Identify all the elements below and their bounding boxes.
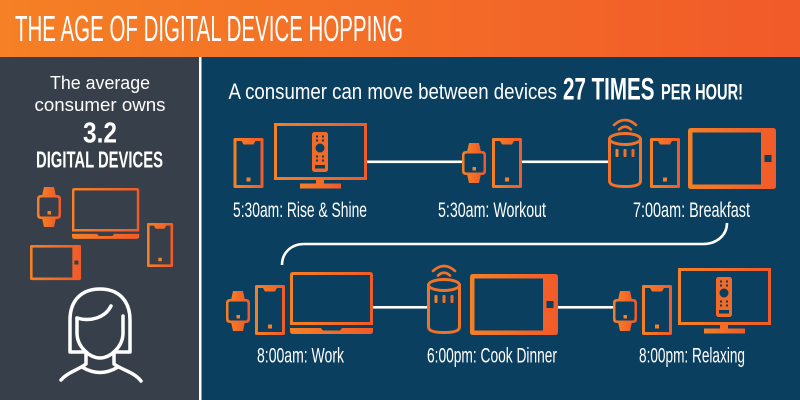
- connector: line: [557, 306, 613, 309]
- icon: tablet: [688, 128, 776, 189]
- icon: tablet: [30, 245, 81, 280]
- step: breakfast: [610, 120, 776, 222]
- panel: device ownership: [0, 57, 199, 400]
- connector: line: [522, 160, 609, 163]
- statistic: 3.2: 3.2: [83, 118, 117, 150]
- headline: [228, 70, 743, 106]
- title: THE AGE OF DIGITAL DEVICE HOPPING: [15, 8, 403, 49]
- headline: 27 TIMES: [563, 70, 654, 106]
- icon: phone: [255, 285, 285, 335]
- icon: laptop: [290, 272, 373, 334]
- icon: smartwatch: [613, 291, 637, 331]
- ownership intro text: [34, 72, 166, 115]
- step: cook dinner: [427, 266, 558, 368]
- icon: laptop: [72, 188, 139, 239]
- connector: line: [367, 160, 462, 163]
- divider: [199, 57, 202, 400]
- icon: person: [61, 289, 141, 381]
- icon: smartwatch: [226, 291, 250, 331]
- icon: tablet: [470, 274, 558, 335]
- panel: device hopping timeline: [202, 57, 800, 400]
- step: workout: [438, 138, 546, 222]
- header banner: [0, 0, 800, 57]
- icon: smart speaker: [610, 120, 640, 186]
- icon: phone: [492, 138, 522, 188]
- connector: row wrap: [282, 223, 727, 265]
- label: 8:00am: Work: [257, 344, 344, 368]
- step: work: [226, 272, 373, 368]
- icon: phone: [147, 223, 173, 267]
- ownership intro text: The average: [50, 72, 150, 93]
- ownership intro text: consumer owns: [34, 94, 166, 115]
- icon: tv with remote: [274, 123, 367, 188]
- icon: smartwatch: [37, 187, 61, 227]
- label: 5:30am: Rise & Shine: [233, 198, 367, 222]
- icon: smart speaker: [428, 266, 460, 332]
- icon: phone: [642, 285, 672, 335]
- icon: smartwatch: [462, 143, 486, 183]
- step: rise and shine: [233, 123, 367, 222]
- connector: line: [373, 306, 427, 309]
- label: 6:00pm: Cook Dinner: [427, 344, 557, 368]
- headline: PER HOUR!: [661, 80, 743, 104]
- step: relaxing: [613, 268, 771, 368]
- icon: phone: [650, 138, 680, 188]
- label: 5:30am: Workout: [438, 198, 546, 222]
- icon: phone: [234, 138, 264, 188]
- statistic label: DIGITAL DEVICES: [36, 146, 163, 172]
- headline: A consumer can move between devices: [228, 79, 557, 104]
- icon: tv with remote: [678, 268, 771, 334]
